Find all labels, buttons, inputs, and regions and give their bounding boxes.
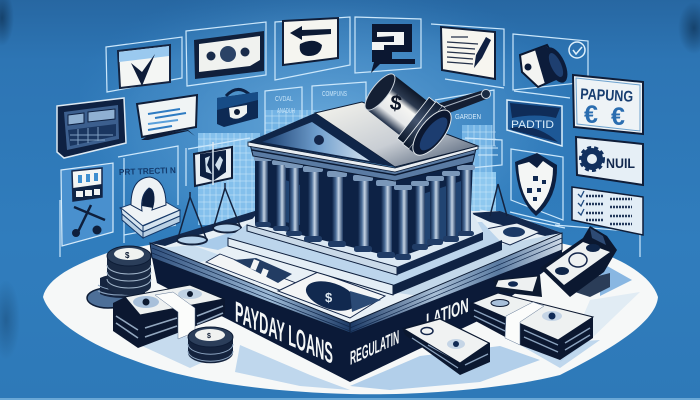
panel: text screen <box>137 95 197 140</box>
platform: REGULATIN <box>350 327 399 370</box>
scale: right <box>490 184 507 216</box>
panel: dark tablet <box>57 98 126 158</box>
panel: ring with check <box>513 34 588 98</box>
ground shadows <box>140 262 640 390</box>
cash stack upper right <box>540 226 617 297</box>
icon: arrow <box>290 26 331 40</box>
printed bill centre <box>278 272 385 318</box>
column 5 <box>327 171 347 247</box>
column 12 <box>457 165 475 236</box>
panel: dollar bill <box>186 22 266 86</box>
panel: capital analysis <box>265 87 302 135</box>
temple interior light <box>285 178 470 248</box>
cash band <box>155 292 195 339</box>
entablature <box>250 144 476 181</box>
cash band <box>505 302 544 345</box>
coin stack left: $ <box>125 251 130 260</box>
ground ellipse <box>43 243 658 394</box>
column 10 <box>426 176 444 245</box>
temple roof <box>248 102 478 181</box>
card: Papung <box>573 75 643 134</box>
coin stack small: $ <box>207 333 211 340</box>
pediment <box>248 113 395 167</box>
column 11 <box>442 171 460 242</box>
temple columns <box>254 156 475 260</box>
column 8 <box>394 185 412 260</box>
column 7 <box>376 180 396 258</box>
icon: gear <box>580 148 604 170</box>
cash bundle left <box>113 285 225 348</box>
printed bill right <box>486 223 540 245</box>
panel: compuns <box>312 82 366 116</box>
card: Papung: € <box>611 103 625 131</box>
coin stack small <box>188 327 233 363</box>
temple interior <box>255 155 473 258</box>
panel: P speech icon <box>355 17 421 73</box>
column 6 <box>353 175 373 252</box>
platform text: regulation end: LATION <box>426 294 469 333</box>
panel: padtid banner: PADTID <box>511 119 554 131</box>
panel: capital analysis: CVDAL <box>275 94 293 103</box>
panel: protection <box>118 146 180 243</box>
icon: briefcase <box>217 89 258 127</box>
coin stack left <box>87 246 151 308</box>
platform side stripes <box>150 243 350 333</box>
column 4 <box>303 166 323 242</box>
gavel dollar sign: $ <box>388 91 403 116</box>
panel: tool card <box>61 163 113 246</box>
grid backdrop <box>198 110 496 225</box>
panel: capital analysis: ANADUH <box>277 106 295 115</box>
icon: crossed pin and tool <box>74 205 105 234</box>
panel: check mark <box>106 37 182 92</box>
card: checklist <box>572 187 643 235</box>
platform dark face <box>152 250 562 382</box>
panel: protection: PRT TRECTI N <box>119 165 176 177</box>
gavel <box>357 66 490 161</box>
panel: padtid banner <box>507 100 562 146</box>
card: gear Nuil: NUIL <box>606 155 635 171</box>
cash bill front <box>402 318 490 375</box>
printed bill left <box>206 254 296 291</box>
icon: check circle <box>569 42 585 58</box>
panel: shield book <box>186 138 250 186</box>
gavel handle <box>430 90 490 119</box>
printed bill corner <box>350 291 381 312</box>
column 2 <box>272 160 290 231</box>
panel: document and pen <box>431 24 504 88</box>
card: gear Nuil <box>576 137 643 185</box>
icon: bowl <box>300 41 322 56</box>
panel: garden <box>435 90 502 168</box>
column 9 <box>411 181 429 250</box>
gavel head <box>357 66 458 161</box>
roof surface <box>315 102 478 167</box>
column 1 <box>254 156 272 227</box>
scale: left <box>177 192 207 244</box>
platform <box>150 210 562 382</box>
printed bill centre: $ <box>325 290 333 305</box>
curled bill <box>493 275 542 297</box>
icon: pen <box>474 37 491 68</box>
panel: garden: GARDEN <box>455 114 481 121</box>
cash bundle right <box>470 293 593 360</box>
scale: rear <box>213 183 241 232</box>
panel: shield <box>510 149 563 224</box>
platform top surface <box>150 211 562 323</box>
panel: arrow card <box>275 17 350 80</box>
icon: book stack and ring <box>120 177 180 238</box>
column 3 <box>285 163 303 236</box>
temple base <box>228 208 502 295</box>
icon: ring <box>520 45 565 87</box>
panel: compuns: COMPUNS <box>322 89 347 98</box>
card: Papung: PAPUNG <box>580 86 634 106</box>
frame lines outer <box>60 200 640 257</box>
card: Papung: € <box>584 101 598 129</box>
